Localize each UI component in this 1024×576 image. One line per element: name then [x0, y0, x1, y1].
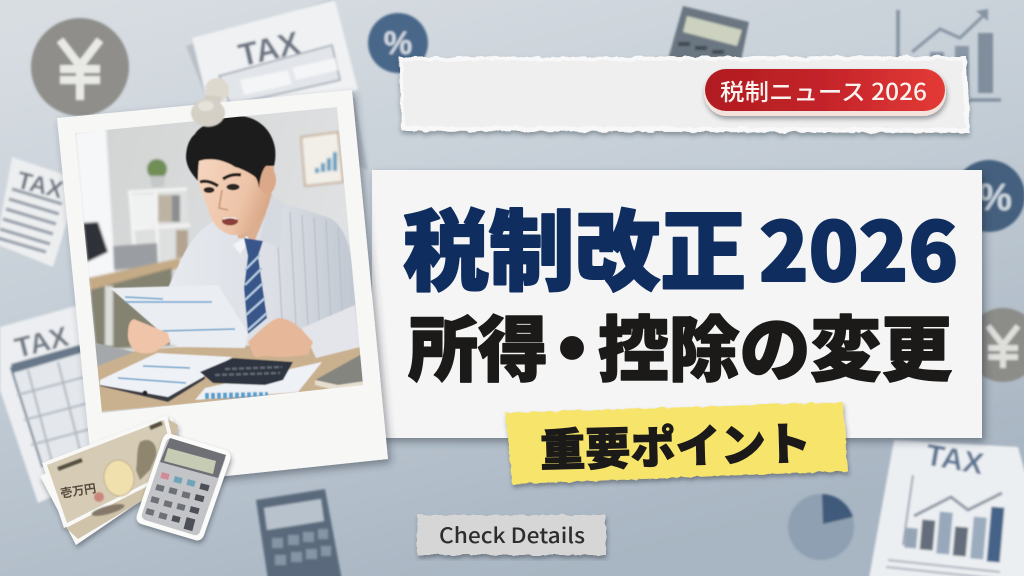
icon: yen banknotes: 壱万円 — [59, 479, 97, 502]
notebook — [315, 355, 365, 391]
icon: calculator top right — [665, 6, 749, 90]
button: check details: Check Details — [439, 520, 585, 550]
subtitle: income and deductions changes — [408, 294, 952, 396]
panel: torn paper strip — [399, 56, 970, 133]
badge: tax news: 税制ニュース 2026 — [720, 73, 927, 107]
second desk paper — [195, 362, 322, 400]
hair — [186, 116, 275, 188]
icon: growth chart top right — [898, 9, 1001, 100]
icon: TAX document top — [186, 0, 368, 170]
title: 税制改正 2026: 税制改正 — [403, 182, 746, 309]
button: check details — [417, 515, 606, 555]
icon: yen coin top left — [31, 18, 129, 116]
icon: percent circle right — [953, 160, 1024, 232]
right sleeve — [302, 305, 360, 358]
laptop — [95, 342, 134, 366]
collar — [233, 195, 283, 254]
face — [197, 153, 274, 235]
tag: important points — [506, 402, 848, 484]
icon: calculator bottom background — [256, 489, 342, 576]
icon: percent circle top: % — [384, 25, 412, 61]
icon: percent circle top — [368, 13, 428, 73]
icon: pie chart — [788, 494, 854, 560]
title: 税制改正 2026: 2026 — [759, 188, 958, 305]
neck — [237, 194, 273, 240]
title: 税制改正 2026 — [403, 182, 958, 309]
panel: main title card — [372, 170, 982, 438]
clipboard and paper — [100, 353, 232, 402]
tie — [244, 238, 267, 334]
desk — [92, 345, 365, 412]
icon: small TAX document left: TAX — [14, 167, 66, 204]
badge: tax news — [704, 69, 946, 116]
held paper — [110, 285, 248, 348]
icon: TAX document top: TAX — [235, 24, 304, 73]
held paper lines — [125, 297, 235, 331]
icon: yen banknotes — [40, 415, 186, 545]
icon: calculator sticker — [136, 434, 230, 540]
subtitle: income and deductions changes: ・ — [536, 294, 608, 396]
panel: polaroid photo frame — [57, 90, 388, 490]
icon: push pin — [191, 78, 229, 127]
ear — [258, 166, 276, 194]
tag: important points: 重要ポイント — [539, 407, 812, 480]
subtitle: income and deductions changes: 所得 — [408, 294, 548, 396]
icon: TAX table document left — [0, 302, 110, 503]
icon: TAX chart document bottom right: TAX — [923, 439, 986, 481]
blue mini chart — [205, 395, 268, 396]
icon: TAX chart document bottom right — [865, 439, 1024, 576]
right hand — [248, 318, 313, 357]
icon: percent circle right: % — [978, 177, 1012, 219]
left hand — [128, 319, 170, 353]
facial features — [200, 175, 241, 225]
icon: small TAX document left — [0, 157, 80, 267]
icon: TAX table document left: TAX — [12, 321, 72, 364]
photo: surprised man checking tax documents — [75, 107, 363, 413]
shirt — [168, 208, 357, 346]
subtitle: income and deductions changes: 控除の変更 — [598, 294, 952, 396]
photo calculator — [200, 358, 293, 385]
icon: yen coin right — [966, 308, 1024, 382]
shirt stripes — [277, 212, 342, 325]
